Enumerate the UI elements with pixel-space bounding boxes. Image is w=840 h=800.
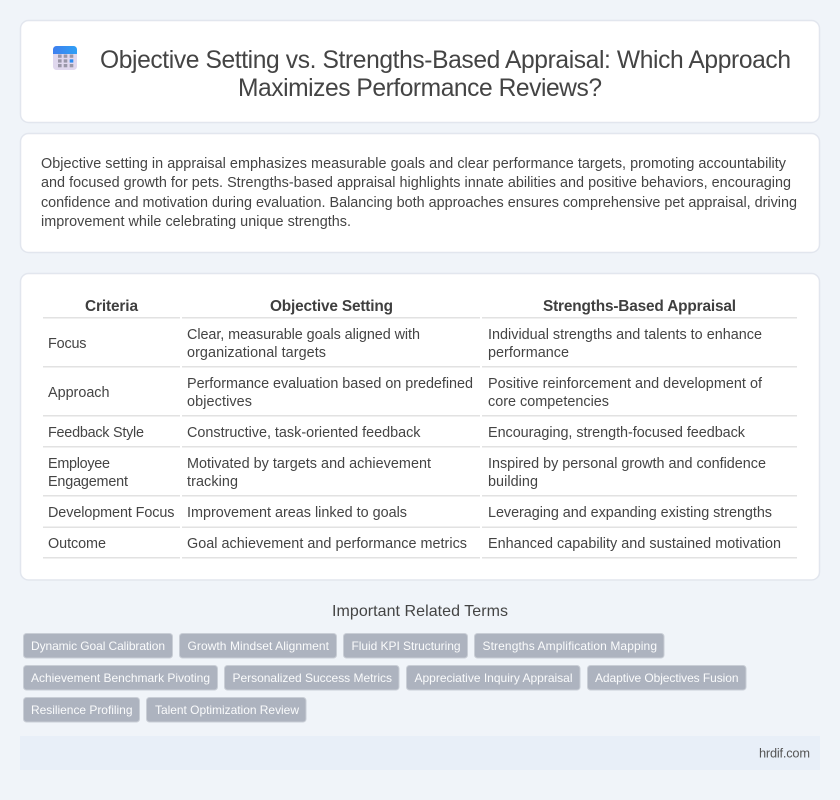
tag (344, 634, 468, 658)
row: outcome (48, 536, 781, 552)
tag: Resilience Profiling (31, 703, 132, 717)
table header row (85, 298, 736, 315)
text block: summary: Objective setting in appraisal emphasizes measurable goals and clear performance targets, promoting accountability (41, 156, 787, 172)
row: focus: Focus (48, 336, 86, 352)
row: development focus: Development Focus (48, 505, 174, 521)
tag (406, 666, 580, 690)
row: approach: Positive reinforcement and development of (488, 376, 763, 392)
row: feedback style: Feedback Style (48, 425, 144, 441)
row: approach: core competencies (488, 394, 609, 410)
tag (24, 666, 218, 690)
row: employee engagement: Inspired by personal growth and confidence (488, 456, 766, 472)
footer (20, 736, 820, 770)
row: development focus: Leveraging and expanding existing strengths (488, 505, 772, 521)
row: employee engagement: Employee (48, 456, 110, 472)
row: employee engagement: tracking (187, 474, 238, 490)
row: focus: organizational targets (187, 345, 326, 361)
tag: Growth Mindset Alignment (188, 639, 330, 653)
table header row: Strengths-Based Appraisal (543, 298, 736, 315)
table header row: Objective Setting (270, 298, 393, 315)
row: feedback style: Constructive, task-oriented feedback (187, 425, 421, 441)
row: focus (48, 327, 762, 361)
tag: Dynamic Goal Calibration (31, 639, 165, 653)
table header row: Criteria (85, 298, 138, 315)
tag (146, 698, 306, 722)
text block: summary: and focused growth for pets. Strengths-based appraisal highlights innate abilities and positive behaviors, encouraging (41, 175, 791, 191)
row: outcome: Enhanced capability and sustained motivation (488, 536, 781, 552)
row: feedback style (48, 425, 746, 441)
title: Objective Setting vs. Strengths-Based Appraisal: Which Approach (100, 47, 791, 74)
title: Maximizes Performance Reviews? (238, 75, 602, 102)
row: focus: Clear, measurable goals aligned with (187, 327, 420, 343)
row: outcome: Outcome (48, 536, 106, 552)
panel: header (20, 20, 820, 122)
row: employee engagement (48, 456, 766, 490)
text block: summary: improvement while celebrating unique strengths. (41, 214, 351, 230)
tag (24, 634, 172, 658)
row: employee engagement: Engagement (48, 474, 128, 490)
icon: calendar (53, 46, 77, 70)
tag: Achievement Benchmark Pivoting (31, 671, 210, 685)
tag: Fluid KPI Structuring (352, 639, 460, 653)
text block: summary (41, 156, 797, 230)
text block: summary: confidence and motivation during evaluation. Balancing both approaches ensures comprehensive pet appraisal, driving (41, 195, 797, 211)
tag: Talent Optimization Review (155, 703, 299, 717)
panel: description (20, 134, 820, 252)
tag: Adaptive Objectives Fusion (595, 671, 738, 685)
tag (180, 634, 336, 658)
row: focus: Individual strengths and talents to enhance (488, 327, 762, 343)
row: employee engagement: Motivated by targets and achievement (187, 456, 431, 472)
tag (474, 634, 664, 658)
tag (224, 666, 399, 690)
row: approach: Approach (48, 385, 110, 401)
row: feedback style: Encouraging, strength-focused feedback (488, 425, 746, 441)
row: approach (48, 376, 763, 410)
tag: Appreciative Inquiry Appraisal (414, 671, 572, 685)
panel: comparison table (20, 274, 820, 580)
row: development focus: Improvement areas linked to goals (187, 505, 407, 521)
tag list: related terms (24, 634, 746, 722)
row: focus: performance (488, 345, 569, 361)
tag (24, 698, 140, 722)
row: approach: Performance evaluation based on predefined (187, 376, 473, 392)
heading: related terms: Important Related Terms (332, 603, 508, 620)
tag: Personalized Success Metrics (232, 671, 392, 685)
footer: hrdif.com (759, 746, 810, 760)
row: employee engagement: building (488, 474, 538, 490)
row: approach: objectives (187, 394, 252, 410)
tag (588, 666, 746, 690)
row: development focus (48, 505, 772, 521)
tag: Strengths Amplification Mapping (482, 639, 657, 653)
title (100, 47, 791, 102)
row: outcome: Goal achievement and performance metrics (187, 536, 467, 552)
